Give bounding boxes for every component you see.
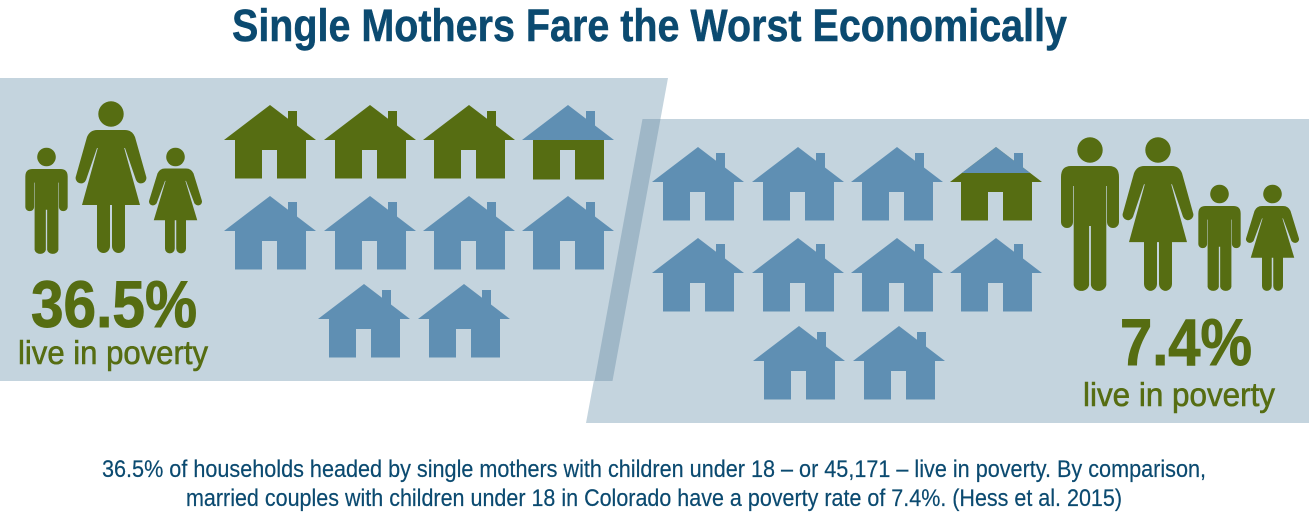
icon: house in poverty 1 [224, 105, 316, 178]
icon: father [1061, 137, 1119, 291]
caption: 36.5% of households headed by single mothers with children under 18 – or 45,171 – live in poverty. By comparison, [102, 456, 1206, 483]
icon: boy [25, 148, 68, 254]
house grid: single mothers [224, 105, 614, 358]
icon: house row 1 [652, 147, 943, 220]
panel: married couples background [586, 119, 1309, 423]
icon: mother [1123, 137, 1193, 291]
stat: 7.4%: 7.4% [1120, 305, 1252, 379]
icon: house row 3 [318, 284, 510, 358]
stat: 36.5%: 36.5% [31, 267, 197, 341]
panel overlap band [594, 119, 660, 381]
icon: house row 2 [224, 196, 614, 270]
panel: single mothers background [0, 78, 668, 381]
icon: single mother family [25, 101, 202, 254]
icon: house row 3 [753, 326, 945, 400]
label: live in poverty, married couples: live in poverty [1083, 376, 1275, 413]
caption: married couples with children under 18 in Colorado have a poverty rate of 7.4%. (Hess et al. 2015) [186, 485, 1122, 512]
icon: house in poverty 2 [324, 105, 416, 178]
icon: married couple family [1061, 137, 1299, 291]
icon: partly filled house [950, 147, 1042, 220]
label: live in poverty, single mothers: live in poverty [18, 334, 208, 371]
icon: boy [1198, 185, 1241, 291]
icon: house row 2 [652, 238, 1042, 312]
icon: house in poverty 3 [423, 105, 515, 178]
house grid: married couples [652, 147, 1042, 400]
title: Single Mothers Fare the Worst Economically [232, 0, 1067, 51]
caption [102, 456, 1206, 512]
icon: mother [76, 101, 146, 253]
icon: girl [1246, 185, 1299, 291]
icon: partly filled house [522, 105, 614, 180]
icon: girl [149, 148, 202, 253]
